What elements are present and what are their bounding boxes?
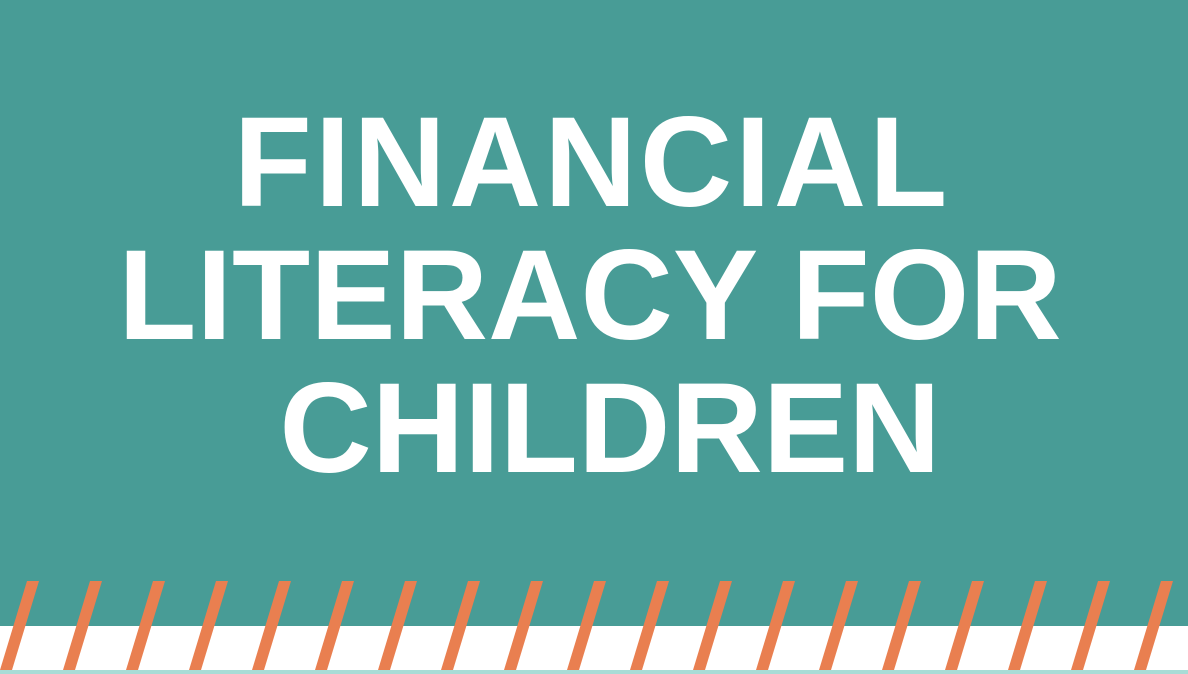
title: LITERACY FOR (118, 224, 1062, 367)
title: CHILDREN (279, 357, 941, 500)
title (118, 91, 1062, 500)
striped footer band (0, 581, 1188, 674)
title: FINANCIAL (234, 91, 950, 234)
